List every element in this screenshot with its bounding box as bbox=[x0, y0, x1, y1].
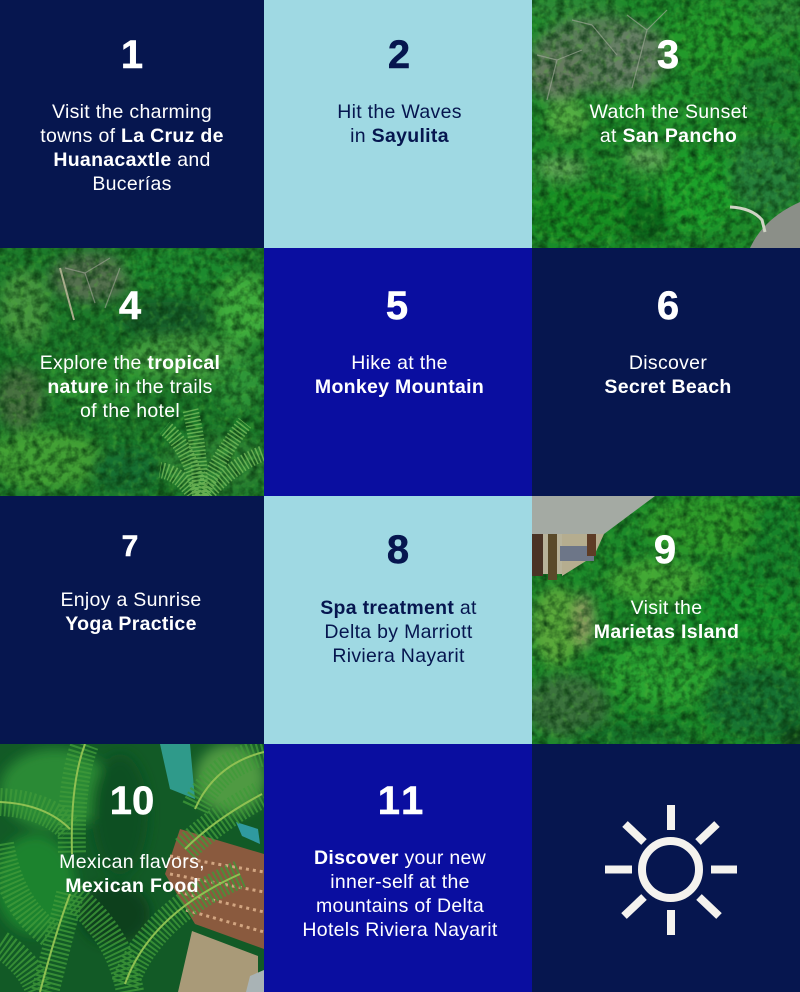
text: marietas bbox=[594, 597, 739, 643]
text: towns bbox=[40, 101, 224, 195]
text: sunset: at San Pancho bbox=[600, 125, 737, 147]
icon: sun bbox=[605, 805, 737, 935]
number 1: 1 bbox=[121, 33, 143, 77]
number 3: 3 bbox=[657, 33, 679, 77]
text: sunset: Watch the Sunset bbox=[590, 101, 748, 123]
palm illustration bbox=[0, 744, 264, 992]
text: yoga: Enjoy a Sunrise bbox=[60, 589, 202, 611]
number 10: 10 bbox=[110, 779, 154, 823]
panel: item 1 bbox=[0, 0, 264, 248]
number 6: 6 bbox=[657, 284, 679, 328]
text: waves: Hit the Waves bbox=[337, 101, 462, 123]
text: tropical nature: Explore the tropical bbox=[40, 352, 220, 374]
text: spa: Riviera Nayarit bbox=[332, 645, 465, 667]
panel: item 4 with forest photo bbox=[0, 248, 264, 496]
panel: item 5 bbox=[264, 248, 532, 496]
panel: item 10 with palm photo bbox=[0, 744, 264, 992]
text: monkey mountain: Hike at the bbox=[351, 352, 448, 374]
panel: item 6 bbox=[532, 248, 800, 496]
text: monkey mountain bbox=[315, 352, 484, 398]
text: sunset bbox=[590, 101, 748, 147]
panel: item 2 bbox=[264, 0, 532, 248]
text: towns: towns of La Cruz de bbox=[40, 125, 224, 147]
panel: sun icon bbox=[532, 744, 800, 992]
panel: item 11 bbox=[264, 744, 532, 992]
foliage illustration bbox=[532, 496, 800, 744]
text: tropical nature: of the hotel bbox=[80, 400, 180, 422]
text: yoga bbox=[60, 589, 202, 635]
text: tropical nature: nature in the trails bbox=[47, 376, 213, 398]
text: secret beach: Discover bbox=[629, 352, 707, 374]
forest illustration bbox=[532, 0, 800, 248]
number 8: 8 bbox=[387, 528, 409, 572]
text: waves: in Sayulita bbox=[350, 125, 449, 147]
text: inner self: Discover your new bbox=[314, 847, 486, 869]
number 2: 2 bbox=[388, 33, 410, 77]
forest illustration bbox=[0, 248, 264, 496]
text: waves bbox=[337, 101, 462, 147]
text: secret beach bbox=[604, 352, 732, 398]
number 11: 11 bbox=[378, 779, 424, 823]
text: monkey mountain: Monkey Mountain bbox=[315, 376, 484, 398]
text: yoga: Yoga Practice bbox=[65, 613, 197, 635]
text: mexican food: Mexican Food bbox=[65, 875, 199, 897]
text: inner self bbox=[302, 847, 498, 941]
text: spa bbox=[320, 597, 477, 667]
text: inner self: Hotels Riviera Nayarit bbox=[302, 919, 498, 941]
panel: item 3 with forest photo bbox=[532, 0, 800, 248]
number 9: 9 bbox=[654, 528, 676, 572]
number 4: 4 bbox=[119, 284, 141, 328]
number 5: 5 bbox=[386, 284, 408, 328]
text: mexican food bbox=[59, 851, 205, 897]
panel: item 8 bbox=[264, 496, 532, 744]
text: marietas: Visit the bbox=[631, 597, 702, 619]
text: inner self: mountains of Delta bbox=[316, 895, 484, 917]
text: towns: Huanacaxtle and bbox=[53, 149, 211, 171]
text: towns: Bucerías bbox=[92, 173, 172, 195]
number 7: 7 bbox=[122, 530, 138, 563]
panel: item 9 with foliage photo bbox=[532, 496, 800, 744]
text: tropical nature bbox=[40, 352, 220, 422]
text: spa: Spa treatment at bbox=[320, 597, 477, 619]
panel: item 7 bbox=[0, 496, 264, 744]
text: marietas: Marietas Island bbox=[594, 621, 739, 643]
text: mexican food: Mexican flavors, bbox=[59, 851, 205, 873]
text: inner self: inner-self at the bbox=[330, 871, 470, 893]
text: secret beach: Secret Beach bbox=[604, 376, 732, 398]
text: towns: Visit the charming bbox=[52, 101, 212, 123]
text: spa: Delta by Marriott bbox=[324, 621, 473, 643]
